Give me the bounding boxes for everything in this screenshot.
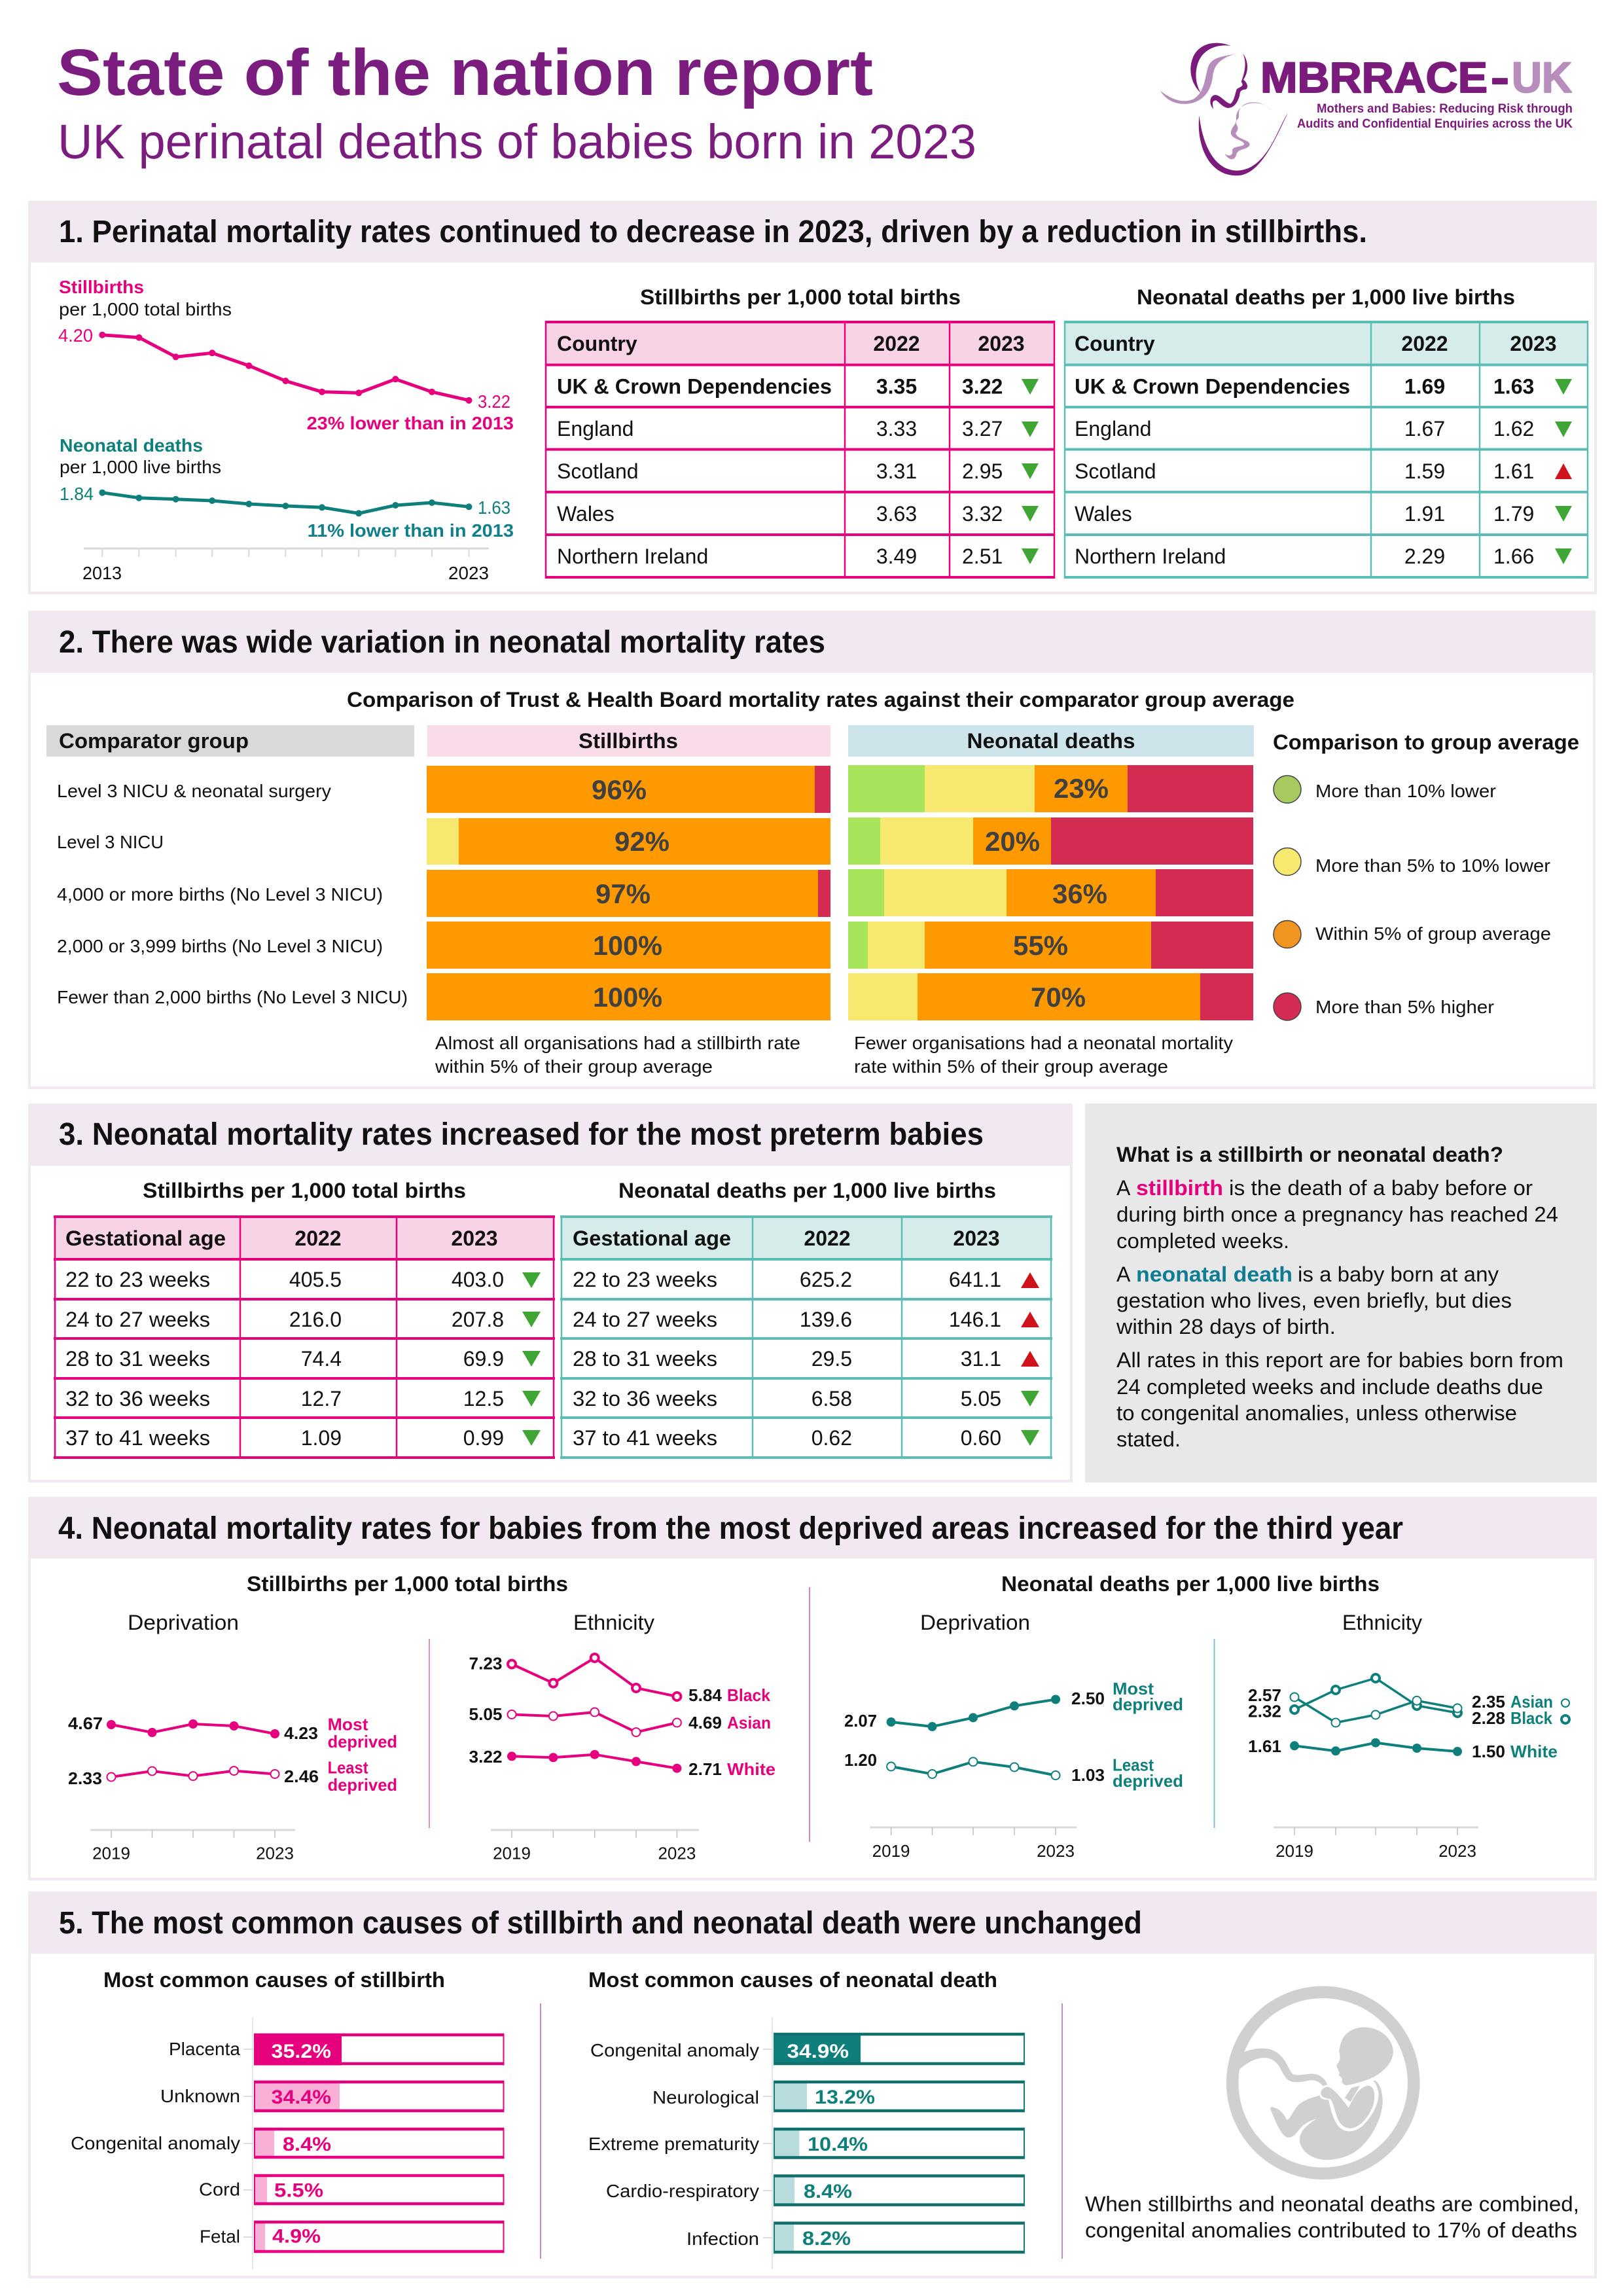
table: neonatal deaths by country: 1.61 bbox=[1493, 459, 1534, 483]
bar chart: causes of neonatal death bbox=[588, 1968, 1025, 2269]
table: neonatal deaths by country: 1.79 bbox=[1493, 502, 1534, 526]
line chart: stillbirth and neonatal trend 2013 to 2023: 2013 bbox=[82, 563, 122, 583]
table: stillbirths by country: 3.33 bbox=[876, 417, 917, 440]
chart: stillbirths by ethnicity: 5.05 bbox=[469, 1704, 503, 1724]
table: stillbirths by gestational age: 0.99 bbox=[463, 1426, 504, 1450]
bar chart: causes of stillbirth: Placenta bbox=[169, 2039, 240, 2059]
chart: neonatal deaths by deprivation: Least bbox=[1113, 1755, 1154, 1775]
line chart: stillbirth and neonatal trend 2013 to 2023: Neonatal deaths bbox=[60, 435, 203, 456]
callout: congenital anomalies: When stillbirths and neonatal deaths are combined, bbox=[1085, 2193, 1579, 2216]
table: neonatal deaths by country: 2022 bbox=[1401, 332, 1448, 355]
chart: stillbirths by ethnicity: 7.23 bbox=[469, 1654, 503, 1674]
stacked bars: stillbirths: 96% bbox=[592, 774, 647, 805]
bar chart: causes of neonatal death: Infection bbox=[687, 2229, 759, 2249]
chart: neonatal deaths by deprivation: 2.50 bbox=[1071, 1689, 1105, 1708]
panel: what is a stillbirth or neonatal death: within 28 days of birth. bbox=[1116, 1315, 1336, 1338]
table: stillbirths by gestational age: 37 to 41 weeks bbox=[65, 1426, 210, 1450]
chart title: Comparison of Trust & Health Board mortality rates against their comparator group average bbox=[347, 688, 1294, 711]
table: neonatal deaths by country: 1.59 bbox=[1404, 459, 1445, 483]
table: neonatal deaths by country: Neonatal deaths per 1,000 live births bbox=[1137, 285, 1515, 309]
logo tagline: Mothers and Babies: Reducing Risk through bbox=[1317, 102, 1573, 116]
chart: stillbirths by ethnicity: Asian bbox=[727, 1713, 771, 1732]
bar chart: causes of neonatal death: Extreme prematurity bbox=[588, 2134, 759, 2154]
section 4 heading bbox=[28, 1497, 1597, 1558]
table: stillbirths by gestational age: 2022 bbox=[294, 1227, 342, 1250]
legend: comparison to group average: Within 5% of group average bbox=[1315, 924, 1551, 944]
logo: MBRRACE-UK: Audits and Confidential Enquiries across the UK bbox=[1297, 117, 1573, 131]
table: neonatal deaths by gestational age: 32 to 36 weeks bbox=[573, 1387, 717, 1410]
table: neonatal deaths by gestational age: 139.6 bbox=[800, 1308, 852, 1331]
panel: what is a stillbirth or neonatal death bbox=[1085, 1103, 1597, 1482]
line chart: stillbirth and neonatal trend 2013 to 2023: 23% lower than in 2013 bbox=[307, 413, 514, 433]
table: neonatal deaths by gestational age: 625.2 bbox=[800, 1268, 852, 1291]
table: neonatal deaths by country: 2.29 bbox=[1404, 545, 1445, 568]
chart: stillbirths by deprivation: deprived bbox=[328, 1775, 397, 1795]
chart: stillbirths by ethnicity: 4.69 bbox=[688, 1713, 722, 1732]
chart: stillbirths by deprivation: Most bbox=[328, 1715, 368, 1734]
panel: what is a stillbirth or neonatal death: A bbox=[1116, 1176, 1131, 1200]
chart: stillbirths by deprivation bbox=[68, 1611, 397, 1863]
table: neonatal deaths by gestational age: 2022 bbox=[804, 1227, 851, 1250]
bar chart: causes of stillbirth: Congenital anomaly bbox=[71, 2133, 240, 2153]
section 3 heading bbox=[28, 1103, 1073, 1166]
panel: what is a stillbirth or neonatal death: during birth once a pregnancy has reached 24 bbox=[1116, 1203, 1558, 1227]
chart: stillbirths by ethnicity: 3.22 bbox=[469, 1747, 503, 1767]
line chart: stillbirth and neonatal trend 2013 to 2023: 3.22 bbox=[478, 391, 510, 412]
table: neonatal deaths by country: England bbox=[1075, 417, 1151, 440]
chart: neonatal deaths by deprivation bbox=[844, 1611, 1183, 1861]
table: neonatal deaths by gestational age: 0.60 bbox=[961, 1426, 1001, 1450]
panel: section 4 deprivation and ethnicity bbox=[28, 1497, 1597, 1879]
bar chart: causes of stillbirth: Cord bbox=[199, 2179, 240, 2200]
stacked bars: neonatal deaths: 70% bbox=[1031, 982, 1086, 1013]
table: stillbirths by country: 3.63 bbox=[876, 502, 917, 526]
bar chart: causes of neonatal death: 8.2% bbox=[802, 2228, 851, 2250]
table: stillbirths by country: 3.35 bbox=[876, 374, 917, 398]
line chart: stillbirth and neonatal trend 2013 to 2023: per 1,000 live births bbox=[60, 457, 221, 477]
table: neonatal deaths by gestational age: 0.62 bbox=[812, 1426, 852, 1450]
table: stillbirths by gestational age: 403.0 bbox=[452, 1268, 504, 1291]
panel: what is a stillbirth or neonatal death: All rates in this report are for babies born from bbox=[1116, 1348, 1563, 1372]
chart: stillbirths by deprivation: 2019 bbox=[92, 1844, 130, 1863]
chart: neonatal deaths by deprivation: 2019 bbox=[872, 1841, 910, 1861]
chart: neonatal deaths by ethnicity: White bbox=[1510, 1742, 1558, 1761]
table: neonatal deaths by gestational age: Neonatal deaths per 1,000 live births bbox=[618, 1179, 996, 1202]
table: neonatal deaths by country: Wales bbox=[1075, 502, 1132, 526]
panel: what is a stillbirth or neonatal death: 24 completed weeks and include deaths due bbox=[1116, 1375, 1543, 1399]
chart: stillbirths by deprivation: 4.23 bbox=[284, 1723, 318, 1743]
table: neonatal deaths by country: 2023 bbox=[1510, 332, 1557, 355]
table: stillbirths by gestational age: 32 to 36 weeks bbox=[65, 1387, 210, 1410]
table: neonatal deaths by gestational age: 37 to 41 weeks bbox=[573, 1426, 717, 1450]
comparator group column: 2,000 or 3,999 births (No Level 3 NICU) bbox=[57, 936, 383, 956]
table: stillbirths by gestational age: 1.09 bbox=[301, 1426, 342, 1450]
panel: section 3 gestational age bbox=[28, 1103, 1073, 1481]
line chart: stillbirth and neonatal trend 2013 to 2023: 4.20 bbox=[58, 325, 93, 346]
subtitle: UK perinatal deaths of babies born in 2023 bbox=[58, 115, 976, 169]
stacked bars: neonatal deaths: Neonatal deaths bbox=[967, 729, 1135, 753]
stacked bars: neonatal deaths: 36% bbox=[1052, 878, 1107, 909]
chart: neonatal deaths by ethnicity: Asian bbox=[1510, 1692, 1553, 1712]
table: neonatal deaths by gestational age: 2023 bbox=[953, 1227, 1000, 1250]
chart: neonatal deaths by deprivation: Deprivation bbox=[920, 1611, 1030, 1634]
chart: stillbirths by deprivation: Deprivation bbox=[128, 1611, 239, 1634]
chart: neonatal deaths by ethnicity bbox=[1248, 1611, 1569, 1861]
table: neonatal deaths by country: UK & Crown Dependencies bbox=[1075, 374, 1350, 398]
table: neonatal deaths by gestational age: 28 to 31 weeks bbox=[573, 1347, 717, 1371]
logo: MBRRACE-UK: UK bbox=[1512, 53, 1572, 101]
table: stillbirths by gestational age: 2023 bbox=[451, 1227, 498, 1250]
table: stillbirths by country: 3.22 bbox=[962, 374, 1003, 398]
bar chart: causes of stillbirth: 35.2% bbox=[271, 2041, 331, 2062]
stacked bars: stillbirths: 100% bbox=[593, 930, 662, 961]
bar chart: causes of neonatal death: 8.4% bbox=[804, 2181, 852, 2202]
chart: neonatal deaths by ethnicity: 2019 bbox=[1275, 1841, 1313, 1861]
line chart: stillbirth and neonatal trend 2013 to 2023: Stillbirths bbox=[59, 277, 144, 297]
table: stillbirths by country: 3.31 bbox=[876, 459, 917, 483]
bar chart: causes of stillbirth: 34.4% bbox=[271, 2087, 331, 2108]
chart: stillbirths by deprivation: 2023 bbox=[256, 1844, 294, 1863]
chart: stillbirths by ethnicity: Ethnicity bbox=[573, 1611, 654, 1634]
table: stillbirths by country: 2023 bbox=[978, 332, 1025, 355]
stacked bars: stillbirths bbox=[427, 725, 830, 1077]
table: stillbirths by country: UK & Crown Dependencies bbox=[557, 374, 832, 398]
section 5 heading: 5. The most common causes of stillbirth and neonatal death were unchanged bbox=[59, 1906, 1142, 1941]
chart: stillbirths by ethnicity: 2019 bbox=[493, 1844, 531, 1863]
table: neonatal deaths by country: 1.66 bbox=[1493, 545, 1534, 568]
bar chart: causes of neonatal death: 13.2% bbox=[815, 2087, 875, 2108]
title: State of the nation report bbox=[57, 36, 873, 109]
legend: comparison to group average: More than 5% higher bbox=[1315, 997, 1494, 1017]
table: neonatal deaths by gestational age: 29.5 bbox=[812, 1347, 852, 1371]
table: stillbirths by country: Wales bbox=[557, 502, 615, 526]
chart: neonatal deaths by deprivation: 1.03 bbox=[1071, 1765, 1105, 1785]
table: neonatal deaths by country: Country bbox=[1075, 332, 1155, 355]
bar chart: causes of stillbirth: Fetal bbox=[200, 2227, 240, 2247]
table: stillbirths by gestational age: 22 to 23 weeks bbox=[65, 1268, 210, 1291]
table: stillbirths by gestational age bbox=[54, 1179, 555, 1459]
comparator group column: Level 3 NICU bbox=[57, 832, 164, 852]
table: neonatal deaths by gestational age: Gestational age bbox=[573, 1227, 731, 1250]
table: stillbirths by country bbox=[546, 285, 1054, 579]
stacked bars: neonatal deaths: Fewer organisations had a neonatal mortality bbox=[854, 1033, 1233, 1053]
line chart: stillbirth and neonatal trend 2013 to 2023: 11% lower than in 2013 bbox=[308, 520, 514, 541]
chart: stillbirths by ethnicity: Black bbox=[727, 1685, 771, 1705]
table: neonatal deaths by gestational age: 22 to 23 weeks bbox=[573, 1268, 717, 1291]
panel: what is a stillbirth or neonatal death: completed weeks. bbox=[1116, 1229, 1289, 1253]
table: stillbirths by gestational age: 405.5 bbox=[289, 1268, 342, 1291]
chart: neonatal deaths by deprivation: 2.07 bbox=[844, 1711, 877, 1731]
chart: neonatal deaths by ethnicity: 1.61 bbox=[1248, 1736, 1281, 1756]
table: neonatal deaths by country: 1.67 bbox=[1404, 417, 1445, 440]
stacked bars: neonatal deaths: rate within 5% of their group average bbox=[854, 1056, 1168, 1077]
table: stillbirths by country: 3.27 bbox=[962, 417, 1003, 440]
table: stillbirths by country: 3.32 bbox=[962, 502, 1003, 526]
logo: MBRRACE-UK bbox=[1160, 43, 1573, 175]
chart: neonatal deaths by deprivation: 1.20 bbox=[844, 1750, 877, 1770]
chart: stillbirths by deprivation: 2.46 bbox=[284, 1767, 319, 1786]
table: neonatal deaths by country: 1.69 bbox=[1404, 374, 1445, 398]
stacked bars: stillbirths: 100% bbox=[593, 982, 662, 1013]
panel: what is a stillbirth or neonatal death: is the death of a baby before or bbox=[1229, 1176, 1533, 1200]
chart: neonatal deaths by ethnicity: 1.50 bbox=[1472, 1742, 1505, 1761]
bar chart: causes of stillbirth: Most common causes of stillbirth bbox=[103, 1968, 445, 1992]
section 1 heading: 1. Perinatal mortality rates continued to decrease in 2023, driven by a reduction in stillbirths. bbox=[59, 215, 1367, 249]
panel: what is a stillbirth or neonatal death: neonatal death bbox=[1136, 1263, 1293, 1286]
table: neonatal deaths by country: 1.62 bbox=[1493, 417, 1534, 440]
logo: MBRRACE-UK: - bbox=[1491, 53, 1509, 101]
stacked bars: neonatal deaths: 20% bbox=[985, 826, 1040, 857]
chart: neonatal deaths by ethnicity: 2.57 bbox=[1248, 1685, 1281, 1705]
heading: stillbirths: Stillbirths per 1,000 total births bbox=[247, 1572, 568, 1596]
comparator group column: 4,000 or more births (No Level 3 NICU) bbox=[57, 884, 383, 905]
stacked bars: stillbirths: 97% bbox=[596, 878, 651, 909]
panel: section 1 perinatal mortality rates bbox=[28, 201, 1597, 593]
chart: stillbirths by ethnicity: 2.71 bbox=[688, 1759, 722, 1779]
table: neonatal deaths by gestational age: 6.58 bbox=[812, 1387, 852, 1410]
section 3 heading: 3. Neonatal mortality rates increased for the most preterm babies bbox=[59, 1117, 984, 1152]
bar chart: causes of stillbirth: 5.5% bbox=[274, 2180, 323, 2202]
table: stillbirths by gestational age: 216.0 bbox=[289, 1308, 342, 1331]
chart: neonatal deaths by ethnicity: Black bbox=[1510, 1708, 1552, 1728]
panel: what is a stillbirth or neonatal death: is a baby born at any bbox=[1298, 1263, 1499, 1286]
table: neonatal deaths by country: 1.91 bbox=[1404, 502, 1445, 526]
table: stillbirths by gestational age: 12.5 bbox=[463, 1387, 504, 1410]
panel: what is a stillbirth or neonatal death: A bbox=[1116, 1263, 1131, 1286]
table: neonatal deaths by gestational age: 5.05 bbox=[961, 1387, 1001, 1410]
legend: comparison to group average: Comparison to group average bbox=[1273, 730, 1579, 754]
line chart: stillbirth and neonatal trend 2013 to 2023: 1.84 bbox=[60, 484, 94, 504]
bar chart: causes of stillbirth bbox=[71, 1968, 504, 2269]
comparator group column: Level 3 NICU & neonatal surgery bbox=[57, 781, 331, 801]
section 2 heading bbox=[28, 611, 1596, 673]
stacked bars: neonatal deaths: 23% bbox=[1054, 773, 1109, 804]
comparator group column bbox=[46, 725, 414, 1007]
table: stillbirths by gestational age: 69.9 bbox=[463, 1347, 504, 1371]
section 5 heading bbox=[28, 1892, 1597, 1954]
bar chart: causes of stillbirth: 4.9% bbox=[272, 2226, 321, 2248]
table: stillbirths by gestational age: 74.4 bbox=[301, 1347, 342, 1371]
bar chart: causes of stillbirth: Unknown bbox=[160, 2086, 240, 2106]
chart: stillbirths by deprivation: 2.33 bbox=[68, 1768, 102, 1788]
table: stillbirths by country: Country bbox=[557, 332, 637, 355]
table: neonatal deaths by gestational age bbox=[560, 1179, 1052, 1459]
logo wordmark: MBRRACE bbox=[1260, 53, 1488, 101]
table: stillbirths by country: Scotland bbox=[557, 459, 639, 483]
heading: neonatal deaths: Neonatal deaths per 1,000 live births bbox=[1001, 1572, 1380, 1596]
line chart: stillbirth and neonatal trend 2013 to 2023: 2023 bbox=[448, 563, 489, 583]
legend: comparison to group average bbox=[1273, 730, 1579, 1020]
chart: neonatal deaths by ethnicity: 2.35 bbox=[1472, 1692, 1505, 1712]
bar chart: causes of neonatal death: Cardio-respiratory bbox=[606, 2181, 759, 2201]
table: neonatal deaths by gestational age: 24 to 27 weeks bbox=[573, 1308, 717, 1331]
bar chart: causes of neonatal death: 10.4% bbox=[808, 2134, 868, 2155]
table: stillbirths by country: Stillbirths per 1,000 total births bbox=[640, 285, 961, 309]
stacked bars: stillbirths: Almost all organisations had a stillbirth rate bbox=[435, 1033, 800, 1053]
chart: neonatal deaths by deprivation: deprived bbox=[1113, 1771, 1183, 1791]
chart: neonatal deaths by deprivation: deprived bbox=[1113, 1695, 1183, 1714]
section 4 heading: 4. Neonatal mortality rates for babies from the most deprived areas increased for the third year bbox=[58, 1511, 1403, 1546]
panel: section 2 variation in mortality rates bbox=[28, 611, 1596, 1088]
panel: what is a stillbirth or neonatal death: stillbirth bbox=[1136, 1176, 1223, 1200]
bar chart: causes of neonatal death: Neurological bbox=[652, 2087, 759, 2108]
panel: what is a stillbirth or neonatal death: stated. bbox=[1116, 1427, 1181, 1451]
chart: neonatal deaths by ethnicity: 2023 bbox=[1438, 1841, 1476, 1861]
table: stillbirths by gestational age: Stillbirths per 1,000 total births bbox=[143, 1179, 466, 1202]
chart: neonatal deaths by deprivation: 2023 bbox=[1037, 1841, 1075, 1861]
chart: stillbirths by ethnicity: White bbox=[727, 1759, 776, 1779]
panel: what is a stillbirth or neonatal death: What is a stillbirth or neonatal death? bbox=[1116, 1143, 1503, 1166]
legend: comparison to group average: More than 5% to 10% lower bbox=[1315, 855, 1550, 876]
chart: stillbirths by ethnicity: 5.84 bbox=[688, 1685, 722, 1705]
line chart: stillbirth and neonatal trend 2013 to 2023: 1.63 bbox=[478, 497, 510, 518]
table: stillbirths by gestational age: 12.7 bbox=[301, 1387, 342, 1410]
section 2 heading: 2. There was wide variation in neonatal mortality rates bbox=[59, 625, 825, 660]
chart: neonatal deaths by ethnicity: 2.32 bbox=[1248, 1702, 1281, 1721]
table: stillbirths by country: 2.51 bbox=[962, 545, 1003, 568]
chart: neonatal deaths by ethnicity: 2.28 bbox=[1472, 1708, 1505, 1728]
bar chart: causes of neonatal death: Most common causes of neonatal death bbox=[588, 1968, 997, 1992]
callout: congenital anomalies bbox=[1085, 2193, 1579, 2242]
panel: section 5 causes of death bbox=[28, 1892, 1597, 2277]
panel: what is a stillbirth or neonatal death: to congenital anomalies, unless otherwise bbox=[1116, 1401, 1517, 1425]
table: neonatal deaths by gestational age: 146.1 bbox=[949, 1308, 1001, 1331]
table: stillbirths by gestational age: 207.8 bbox=[452, 1308, 504, 1331]
chart: neonatal deaths by deprivation: Most bbox=[1113, 1679, 1154, 1698]
logo mark bbox=[1160, 43, 1288, 175]
chart: stillbirths by deprivation: 4.67 bbox=[68, 1713, 103, 1733]
table: stillbirths by gestational age: 24 to 27 weeks bbox=[65, 1308, 210, 1331]
table: stillbirths by country: 2022 bbox=[873, 332, 920, 355]
comparator group column: Comparator group bbox=[59, 729, 249, 753]
icon: baby in womb bbox=[1232, 1992, 1414, 2174]
stacked bars: stillbirths: 92% bbox=[615, 826, 669, 857]
table: stillbirths by country: 3.49 bbox=[876, 545, 917, 568]
table: neonatal deaths by gestational age: 31.1 bbox=[961, 1347, 1001, 1371]
chart: stillbirths by deprivation: Least bbox=[328, 1757, 368, 1777]
stacked bars: neonatal deaths: 55% bbox=[1013, 930, 1068, 961]
table: stillbirths by gestational age: Gestational age bbox=[65, 1227, 226, 1250]
chart: stillbirths by ethnicity: 2023 bbox=[658, 1844, 696, 1863]
chart: stillbirths by deprivation: deprived bbox=[328, 1732, 397, 1751]
panel: what is a stillbirth or neonatal death: gestation who lives, even briefly, but dies bbox=[1116, 1289, 1512, 1312]
callout: congenital anomalies: congenital anomalies contributed to 17% of deaths bbox=[1085, 2219, 1577, 2242]
stacked bars: neonatal deaths bbox=[848, 725, 1254, 1077]
table: stillbirths by gestational age: 28 to 31 weeks bbox=[65, 1347, 210, 1371]
legend: comparison to group average: More than 10% lower bbox=[1315, 781, 1496, 801]
bar chart: causes of neonatal death: Congenital anomaly bbox=[590, 2040, 759, 2060]
chart: neonatal deaths by ethnicity: Ethnicity bbox=[1342, 1611, 1422, 1634]
stacked bars: stillbirths: Stillbirths bbox=[579, 729, 678, 753]
table: stillbirths by country: 2.95 bbox=[962, 459, 1003, 483]
section 1 heading bbox=[28, 201, 1597, 262]
table: stillbirths by country: Northern Ireland bbox=[557, 545, 708, 568]
table: neonatal deaths by gestational age: 641.1 bbox=[949, 1268, 1001, 1291]
comparator group column: Fewer than 2,000 births (No Level 3 NICU) bbox=[57, 987, 408, 1007]
bar chart: causes of neonatal death: 34.9% bbox=[787, 2041, 849, 2062]
table: neonatal deaths by country: Northern Ireland bbox=[1075, 545, 1226, 568]
bar chart: causes of stillbirth: 8.4% bbox=[283, 2134, 331, 2155]
table: neonatal deaths by country: Scotland bbox=[1075, 459, 1156, 483]
line chart: stillbirth and neonatal trend 2013 to 2023: per 1,000 total births bbox=[59, 299, 232, 319]
table: neonatal deaths by country: 1.63 bbox=[1493, 374, 1534, 398]
table: neonatal deaths by country bbox=[1065, 285, 1588, 579]
line chart: stillbirth and neonatal trend 2013 to 2023 bbox=[58, 277, 514, 583]
chart: stillbirths by ethnicity bbox=[469, 1611, 776, 1863]
stacked bars: stillbirths: within 5% of their group average bbox=[435, 1056, 713, 1077]
table: stillbirths by country: England bbox=[557, 417, 633, 440]
